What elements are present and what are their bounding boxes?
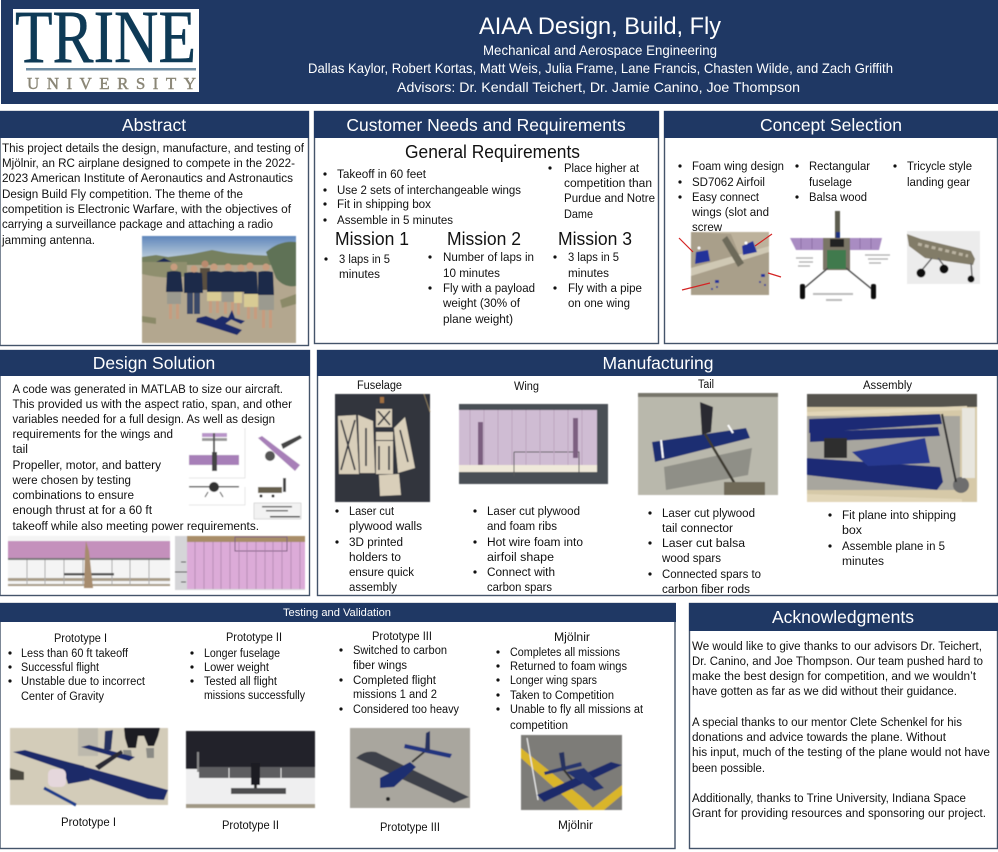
- design solution text: variables needed for a full design. As well as design: [12, 412, 275, 426]
- list: fuselage: 3D printed: [349, 535, 403, 549]
- column: Mjölnir: competition: [510, 720, 568, 732]
- acknowledgments text: We would like to give thanks to our advisors Dr. Teichert,: [692, 639, 982, 653]
- acknowledgments text: Additionally, thanks to Trine University, Indiana Space: [692, 791, 966, 805]
- panel: design solution: [0, 350, 310, 596]
- column: wing: Wing: [514, 381, 539, 393]
- abstract text: competition is Electronic Warfare, with the objectives of: [2, 202, 292, 216]
- concept list: fuselage: Balsa wood: [809, 190, 867, 204]
- design solution text: requirements for the wings and: [12, 427, 173, 441]
- column: assembly: Assembly: [863, 380, 912, 392]
- list: assembly: Fit plane into shipping: [842, 508, 956, 522]
- list: tail: Connected spars to: [662, 567, 761, 581]
- column: Mjölnir: Taken to Competition: [510, 690, 614, 702]
- mission 3: minutes: [568, 266, 609, 280]
- column: prototype I: Successful flight: [21, 662, 100, 674]
- heading: design solution: Design Solution: [93, 353, 215, 373]
- concept list: fuselage: Rectangular: [809, 159, 870, 173]
- list: wing: Connect with: [487, 565, 555, 579]
- back person: [200, 268, 210, 290]
- design solution text: tail: [12, 442, 28, 456]
- column: Mjölnir: Returned to foam wings: [510, 661, 627, 673]
- general requirements list: competition than: [564, 176, 652, 190]
- column: prototype I: Less than 60 ft takeoff: [21, 648, 129, 660]
- list: wing: Laser cut plywood: [487, 504, 580, 518]
- general requirements list: Place higher at: [564, 161, 639, 175]
- column: prototype I: Prototype I: [54, 633, 107, 645]
- panel: manufacturing: [317, 350, 998, 596]
- abstract text: 2023 American Institute of Aeronautics and Astronautics: [2, 171, 293, 185]
- abstract text: This project details the design, manufacture, and testing of: [2, 141, 305, 155]
- column: prototype II: missions successfully: [204, 690, 305, 702]
- image: wing connection CAD with arrows: [679, 232, 781, 295]
- list: assembly: [828, 508, 956, 568]
- mission 1: 3 laps in 5: [339, 252, 390, 266]
- design solution text: [12, 382, 292, 533]
- column: Mjölnir: Unable to fly all missions at: [510, 704, 644, 716]
- column: prototype III: Completed flight: [353, 675, 437, 687]
- list: tail: tail connector: [662, 521, 733, 535]
- mission 3: 3 laps in 5: [568, 250, 619, 264]
- mission 3: Mission 3: [558, 229, 632, 249]
- photo: plane packed in shipping box: [807, 394, 977, 502]
- caption: prototype I: Prototype I: [61, 817, 116, 829]
- acknowledgments text: make the best design for competition, and we wouldn’t: [692, 669, 977, 683]
- design solution text: Propeller, motor, and battery: [12, 458, 162, 472]
- list: fuselage: assembly: [349, 580, 398, 594]
- concept list: wing: Foam wing design: [692, 159, 784, 173]
- column: prototype I: Center of Gravity: [21, 691, 104, 703]
- list: wing: airfoil shape: [487, 550, 554, 564]
- list: wing: carbon spars: [487, 580, 552, 594]
- concept list: wing: [678, 159, 784, 234]
- acknowledgments text: donations and advice towards the plane. Without: [692, 730, 947, 744]
- general requirements list: Use 2 sets of interchangeable wings: [337, 183, 521, 197]
- heading: acknowledgments: Acknowledgments: [772, 607, 914, 627]
- list: fuselage: ensure quick: [349, 565, 415, 579]
- column: fuselage: Fuselage: [357, 380, 402, 392]
- photo: Mjölnir on tarmac: [521, 735, 622, 810]
- general requirements list: [323, 161, 655, 227]
- acknowledgments text: been possible.: [692, 761, 765, 775]
- column: tail: Tail: [698, 379, 714, 391]
- column: Mjölnir: Mjölnir: [554, 632, 590, 644]
- column: prototype II: Longer fuselage: [204, 648, 280, 660]
- column: prototype II: [186, 632, 315, 832]
- image: pink wing ribs close-up: [175, 536, 305, 590]
- subtitle: Mechanical and Aerospace Engineering: [483, 42, 717, 58]
- photo: prototype II: [186, 731, 315, 808]
- list: fuselage: Laser cut: [349, 504, 394, 518]
- mission 2: Number of laps in: [443, 250, 534, 264]
- panel: concept selection: [664, 111, 998, 344]
- caption: prototype III: Prototype III: [380, 822, 440, 834]
- list: wing: [473, 504, 583, 594]
- column: wing: [459, 381, 608, 594]
- acknowledgments text: have gotten as far as we did without their guidance.: [692, 684, 957, 698]
- abstract text: [1, 141, 305, 247]
- photo: tail assembly on floor: [638, 393, 778, 495]
- column: Mjölnir: Completes all missions: [510, 647, 620, 659]
- column: fuselage: [335, 380, 430, 594]
- image: three-view CAD drawing: [187, 428, 305, 520]
- list: wing: Hot wire foam into: [487, 535, 583, 549]
- mission 1: minutes: [339, 267, 380, 281]
- panel: acknowledgments: [689, 603, 998, 848]
- list: tail: Laser cut balsa: [662, 536, 745, 550]
- column: prototype I: Unstable due to incorrect: [21, 676, 146, 688]
- mission 1: Mission 1: [335, 229, 409, 249]
- photo: prototype III: [350, 728, 470, 808]
- heading: concept selection: Concept Selection: [760, 115, 902, 135]
- design solution text: were chosen by testing: [12, 473, 131, 487]
- column: Mjölnir: Longer wing spars: [510, 675, 597, 687]
- column: tail: [638, 379, 778, 596]
- mission 3: on one wing: [568, 296, 630, 310]
- mission 2: weight (30% of: [442, 296, 521, 310]
- list: tail: carbon fiber rods: [662, 582, 750, 596]
- list: tail: [648, 506, 761, 596]
- abstract text: jamming antenna.: [1, 233, 95, 247]
- list: fuselage: [335, 504, 422, 594]
- concept list: landing gear: landing gear: [907, 175, 970, 189]
- acknowledgments text: A special thanks to our mentor Clete Schenkel for his: [692, 715, 962, 729]
- people: [166, 271, 274, 295]
- authors: Dallas Kaylor, Robert Kortas, Matt Weis, Julia Frame, Lane Francis, Chasten Wilde, and Zach Griffith: [308, 60, 893, 76]
- general requirements list: Purdue and Notre: [564, 191, 655, 205]
- list: wing: and foam ribs: [487, 519, 557, 533]
- heading: customer needs: Customer Needs and Requirements: [346, 115, 626, 135]
- list: assembly: minutes: [842, 554, 884, 568]
- heading: testing and validation: Testing and Validation: [283, 607, 391, 619]
- design solution text: takeoff while also meeting power requirements.: [12, 519, 259, 533]
- design solution text: enough thrust at for a 60 ft: [12, 503, 153, 517]
- image: front view with payload: [790, 211, 890, 301]
- acknowledgments text: his input, much of the testing of the plane would not have: [692, 745, 990, 759]
- column: prototype II: Prototype II: [226, 632, 282, 644]
- photo: prototype I: [10, 728, 168, 805]
- column: prototype III: Prototype III: [372, 631, 432, 643]
- mission 3: Fly with a pipe: [568, 281, 642, 295]
- heading: general requirements: General Requirements: [405, 142, 580, 162]
- column: prototype II: Lower weight: [204, 662, 270, 674]
- mission 2: plane weight): [443, 312, 513, 326]
- mission 2: [428, 229, 535, 326]
- list: fuselage: plywood walls: [349, 519, 422, 533]
- general requirements list: Dame: [564, 207, 593, 221]
- general requirements list: Assemble in 5 minutes: [337, 213, 453, 227]
- design solution text: combinations to ensure: [12, 488, 134, 502]
- design solution text: A code was generated in MATLAB to size our aircraft.: [12, 382, 283, 396]
- mission 2: Mission 2: [447, 229, 521, 249]
- abstract text: carrying a surveillance package and attaching a radio: [2, 217, 273, 231]
- image: tricycle landing gear: [907, 231, 980, 284]
- column: prototype III: Considered too heavy: [353, 704, 459, 716]
- panel: abstract: [0, 111, 309, 346]
- photo: laser cut plywood parts: [335, 394, 430, 502]
- mission 2: 10 minutes: [443, 266, 500, 280]
- acknowledgments text: Grant for providing resources and sponsoring our project.: [692, 806, 986, 820]
- header banner: [1, 0, 998, 104]
- concept list: wing: Easy connect: [692, 190, 759, 204]
- column: prototype III: missions 1 and 2: [353, 689, 437, 701]
- general requirements list: Fit in shipping box: [337, 197, 432, 211]
- concept list: wing: screw: [692, 220, 722, 234]
- panel: customer needs and requirements: [314, 111, 659, 344]
- column: assembly: [807, 380, 977, 568]
- list: assembly: box: [842, 523, 863, 537]
- acknowledgments text: [692, 639, 990, 820]
- mission 3: [553, 229, 642, 310]
- advisors: Advisors: Dr. Kendall Teichert, Dr. Jamie Canino, Joe Thompson: [397, 79, 800, 95]
- mission 2: Fly with a payload: [443, 281, 535, 295]
- abstract text: Mjölnir, an RC airplane designed to compete in the 2022-: [2, 156, 295, 170]
- column: Mjölnir: [496, 632, 644, 832]
- title: AIAA Design, Build, Fly: [479, 13, 721, 40]
- heading: manufacturing: Manufacturing: [603, 353, 713, 373]
- list: tail: wood spars: [661, 551, 721, 565]
- concept list: wing: wings (slot and: [691, 205, 769, 219]
- concept list: fuselage: [795, 159, 870, 204]
- concept list: wing: SD7062 Airfoil: [692, 175, 765, 189]
- mission 1: [324, 229, 409, 281]
- column: prototype II: Tested all flight: [204, 676, 278, 688]
- column: prototype III: fiber wings: [353, 660, 407, 672]
- general requirements list: Takeoff in 60 feet: [337, 167, 427, 181]
- caption: Mjölnir: Mjölnir: [558, 820, 593, 832]
- photo: foam wing with ribs: [459, 404, 608, 484]
- list: assembly: Assemble plane in 5: [842, 539, 945, 553]
- panel: testing and validation: [0, 603, 676, 848]
- column: prototype III: [339, 631, 470, 834]
- abstract text: Design Build Fly competition. The theme of the: [2, 187, 243, 201]
- concept list: landing gear: [893, 159, 972, 189]
- image: wing structure plan view: [8, 536, 170, 588]
- heading: abstract: Abstract: [122, 115, 186, 135]
- concept list: fuselage: fuselage: [809, 175, 852, 189]
- photo: team with airplane: [142, 236, 296, 343]
- logo: Trine University: UNIVERSITY: [27, 74, 196, 93]
- concept list: landing gear: Tricycle style: [907, 159, 972, 173]
- column: prototype I: [8, 633, 168, 829]
- list: tail: Laser cut plywood: [662, 506, 755, 520]
- list: fuselage: holders to: [349, 550, 401, 564]
- caption: prototype II: Prototype II: [222, 820, 279, 832]
- column: prototype III: Switched to carbon: [353, 645, 447, 657]
- design solution text: This provided us with the aspect ratio, span, and other: [12, 397, 292, 411]
